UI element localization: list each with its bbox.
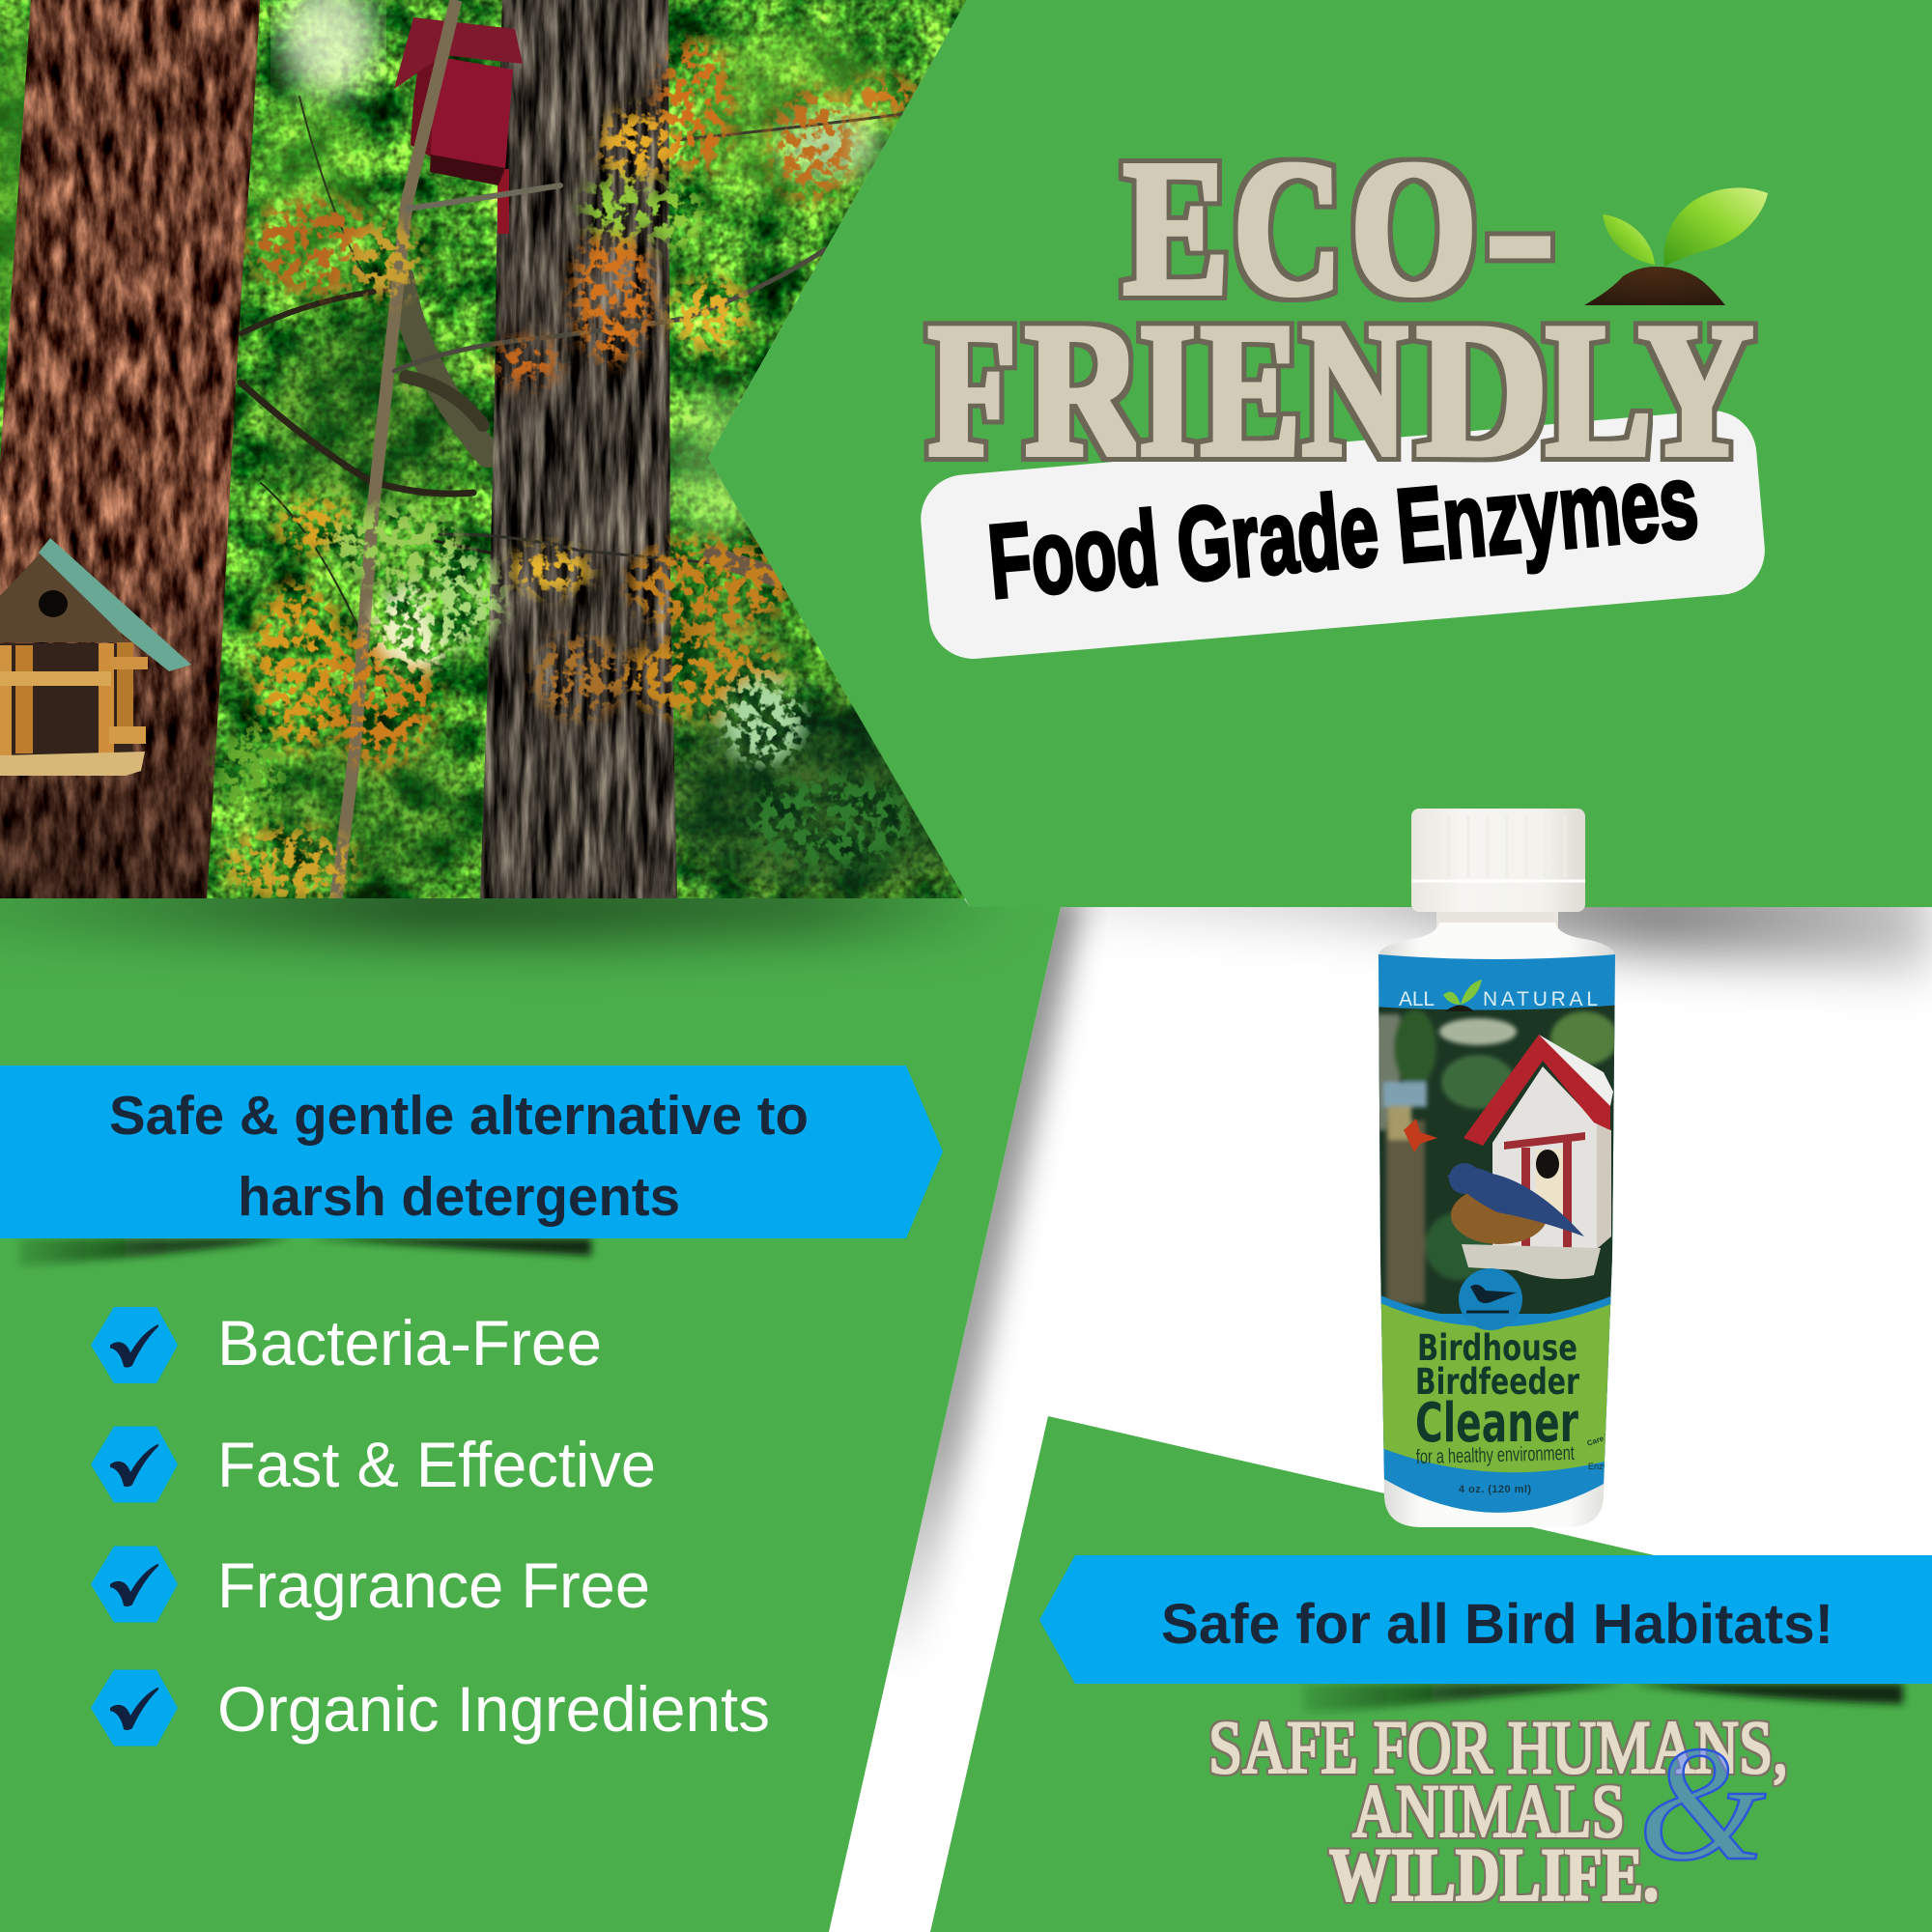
tagline: safe for humans, animals and wildlife: ANIMALS: [1352, 1769, 1625, 1853]
banner text: [109, 1085, 809, 1228]
pine trunk: [0, 0, 260, 898]
heading: eco-friendly: N: [1302, 284, 1407, 496]
label text: Care Free: [1586, 1428, 1623, 1448]
left green panel: [0, 874, 1082, 1932]
heading: eco-friendly: L: [1546, 284, 1652, 496]
product bottle: [1372, 809, 1625, 1546]
bottle neck: [1436, 908, 1558, 937]
tagline: safe for humans, animals and wildlife: [1208, 1705, 1788, 1917]
label text: NATURAL: [1483, 988, 1598, 1010]
thin sapling stem: [336, 0, 456, 898]
label text: Cleaner: [1415, 1392, 1578, 1455]
icon: sprout: [1584, 187, 1768, 305]
white tag: food grade enzymes: [917, 407, 1769, 663]
label green field: [1381, 1295, 1611, 1513]
heading: eco-friendly: O: [1350, 122, 1477, 335]
label text: ALL: [1399, 988, 1435, 1010]
red birdhouse: [394, 17, 523, 234]
banner text: Safe & gentle alternative to: [109, 1085, 809, 1147]
tagline: safe for humans, animals and wildlife: WILDLIFE.: [1329, 1833, 1659, 1917]
tagline: safe for humans, animals and wildlife: SAFE FOR HUMANS,: [1208, 1705, 1788, 1789]
item: fragrance free: Fragrance Free: [217, 1549, 650, 1621]
banner text: harsh detergents: [238, 1166, 680, 1228]
banner text: Safe for all Bird Habitats!: [1161, 1593, 1833, 1656]
bottle label: [1378, 954, 1615, 1513]
feeder birdhouse: [0, 538, 191, 776]
label text: Enzymes: [1588, 1462, 1625, 1471]
dark branches: [238, 96, 494, 696]
bright canopy light: [0, 0, 1014, 908]
heading: eco-friendly: D: [1416, 284, 1548, 496]
label text: [1399, 980, 1625, 1495]
checklist: [91, 1307, 770, 1747]
banner: safe and gentle: [0, 1065, 943, 1265]
banner: safe for all bird habitats: [1039, 1555, 1932, 1712]
white background panel with shadows: [893, 907, 1932, 1649]
heading: eco-friendly: [928, 122, 1753, 496]
icon: bird badge: [1459, 1268, 1522, 1330]
item: bacteria-free: Bacteria-Free: [217, 1307, 602, 1378]
forest photo with birdhouses: [0, 0, 1014, 908]
side branches: [394, 114, 903, 578]
label text: for a healthy environment: [1416, 1442, 1575, 1468]
ampersand: &: [1638, 1713, 1766, 1894]
bottom right green panel: [930, 1416, 1932, 1932]
heading: eco-friendly: I: [1139, 284, 1196, 496]
item: fast and effective: Fast & Effective: [217, 1429, 656, 1500]
label text: Birdfeeder: [1415, 1361, 1580, 1403]
label photo: [1372, 1005, 1623, 1314]
heading: eco-friendly: E: [1201, 284, 1300, 496]
bottle body: [1378, 923, 1615, 1527]
label text: 4 oz. (120 ml): [1459, 1484, 1531, 1495]
autumn leaf clusters: [216, 39, 924, 903]
heading: eco-friendly: -: [1485, 122, 1555, 335]
heading: eco-friendly: R: [1025, 284, 1145, 496]
item: organic ingredients: Organic Ingredients: [217, 1673, 770, 1745]
label text: Birdhouse: [1417, 1327, 1577, 1369]
oak trunk: [480, 0, 677, 898]
top green panel: [708, 0, 1932, 907]
heading: eco-friendly: C: [1234, 122, 1342, 335]
bottle cap: [1411, 809, 1585, 912]
heading: eco-friendly: Y: [1638, 284, 1753, 496]
heading: eco-friendly: E: [1123, 122, 1229, 335]
heading: eco-friendly: F: [928, 284, 1016, 496]
